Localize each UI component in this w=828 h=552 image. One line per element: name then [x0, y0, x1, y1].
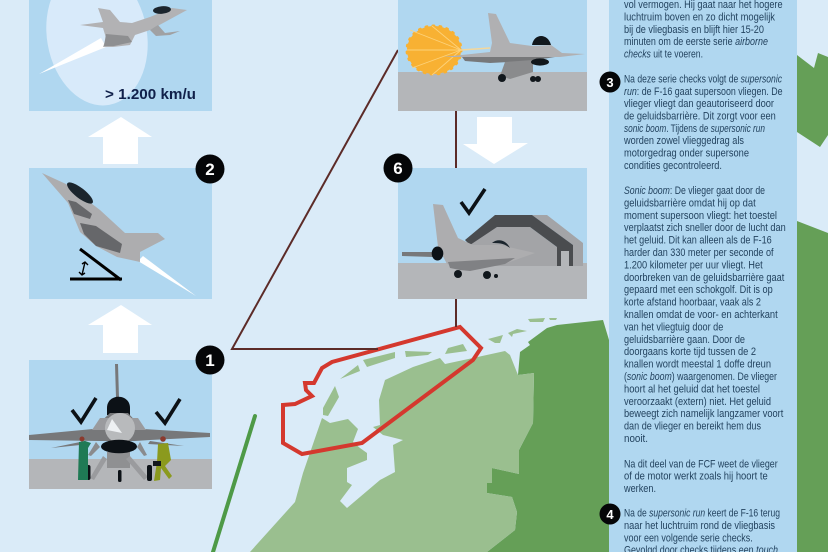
- paragraph: sonic boom: knallen omdat de voor- en achterkant: [624, 309, 778, 321]
- ground: [29, 459, 212, 489]
- paragraph: sonic boom: Sonic boom: De vlieger gaat door de: [624, 185, 765, 197]
- speed label: > 1.200 km/u: [105, 86, 196, 103]
- paragraph: sonic boom: doorbreken van de geluidsbarrière gaat: [624, 272, 784, 284]
- panel: steep climb: [29, 168, 212, 299]
- paragraph: supersonic run: condities gecontroleerd.: [624, 160, 722, 172]
- paragraph: supersonic run: sonic boom. Tijdens de supersonic run: [624, 123, 765, 135]
- step number 2: 2: [205, 160, 215, 179]
- shock cone: [36, 0, 158, 114]
- paragraph: sonic boom: harder dan 330 meter per seconde of: [624, 247, 774, 259]
- jet taxiing: [402, 204, 535, 279]
- paragraph: sonic boom: het geluid. Dit kan alleen als de F-16: [624, 235, 772, 247]
- hangar: [465, 215, 583, 266]
- paragraph: return: [624, 508, 780, 552]
- paragraph: sonic boom: moment supersoon vliegt: het toestel: [624, 210, 777, 222]
- map of the Netherlands: [250, 318, 612, 552]
- arrow: up: [88, 117, 152, 164]
- paragraph: return: voor een volgende serie checks.: [624, 532, 753, 544]
- ground: [398, 72, 587, 111]
- paragraph: sonic boom: dan de vlieger en bereikt hem dus: [624, 421, 761, 433]
- map: light green land: [250, 351, 534, 552]
- paragraph: sonic boom: beweegt zich namelijk langzamer voort: [624, 408, 783, 420]
- paragraph: climb: [624, 0, 783, 60]
- paragraph: sonic boom: hoort al het geluid dat het toestel: [624, 383, 760, 395]
- paragraph: supersonic run: [623, 74, 783, 172]
- brake parachute: [407, 26, 490, 75]
- flame: [39, 38, 106, 74]
- panel: pre-flight checks: [29, 360, 212, 489]
- step number 1: [196, 346, 224, 374]
- paragraph: sonic boom: knallen wordt meestal 1 doffe dreun: [624, 359, 771, 371]
- paragraph: supersonic run: de geluidsbarrière. Dit zorgt voor een: [624, 110, 776, 122]
- step number 1: 1: [205, 351, 215, 370]
- paragraph: sonic boom: [624, 185, 786, 445]
- paragraph: supersonic run: worden zowel vlieggedrag als: [623, 135, 744, 147]
- step number 4: 4: [606, 507, 614, 522]
- map: red test area outline: [283, 327, 481, 454]
- green route line: [213, 416, 255, 552]
- paragraph: return: Na de supersonic run keert de F-16 terug: [624, 508, 780, 520]
- ground: [398, 263, 587, 299]
- flame: [138, 256, 196, 296]
- paragraph: climb: minuten om de eerste serie airborne: [624, 36, 768, 48]
- paragraph: sonic boom: doorgaans korte tijd tussen de 2: [624, 346, 756, 358]
- connector lines: [232, 50, 456, 349]
- check mark: [156, 399, 180, 423]
- step number 2: [196, 154, 224, 184]
- panel: supersonic flight: [29, 0, 212, 114]
- paragraph: sonic boom: van het vliegtuig door de: [624, 321, 723, 333]
- paragraph: supersonic run: Na deze serie checks volgt de supersonic: [624, 74, 783, 86]
- paragraph: sonic boom: nooit.: [624, 433, 648, 445]
- arrow: up: [88, 305, 152, 353]
- paragraph: sonic boom: geluidsbarrière omdat hij op dat: [624, 197, 756, 209]
- mechanic in green: [78, 436, 91, 480]
- text column: [609, 0, 797, 552]
- panel: landing with parachute: [398, 0, 587, 111]
- paragraph: sonic boom: veroorzaakt (extern) niet. Het geluid: [624, 396, 771, 408]
- map: dark green eastern land: [487, 320, 612, 552]
- climb angle symbol: [70, 249, 122, 280]
- jet climbing steeply: [42, 173, 165, 262]
- map: Wadden islands: [323, 318, 557, 416]
- right side land: [797, 53, 828, 552]
- step number 4: [600, 504, 620, 524]
- paragraph: sonic boom: gepaard met een schokgolf. Dit is op: [624, 284, 773, 296]
- step number 3: 3: [606, 75, 614, 90]
- step number 6: 6: [393, 159, 403, 178]
- jet front view: [29, 364, 210, 482]
- paragraph: conclusion: [623, 458, 778, 495]
- pilot in olive: [153, 436, 172, 481]
- step number 6: [384, 154, 412, 182]
- check mark: [461, 189, 485, 213]
- paragraph: supersonic run: run: de F-16 gaat supersoon vliegen. De: [624, 86, 783, 98]
- paragraph: sonic boom: geluidsbarrière gaan. Door de: [624, 334, 745, 346]
- step number 3: [600, 72, 620, 92]
- paragraph: conclusion: of de motor werkt zoals hij hoort te: [624, 471, 768, 483]
- paragraph: conclusion: werken.: [623, 483, 656, 495]
- arrow: down: [463, 117, 528, 164]
- paragraph: supersonic run: vlieger vliegt dan geautoriseerd door: [624, 98, 774, 110]
- paragraph: climb: bij de vliegbasis en blijft hier 15-20: [624, 24, 764, 36]
- paragraph: return: naar het luchtruim rond de vliegbasis: [624, 520, 775, 532]
- paragraph: sonic boom: 1.200 kilometer per uur vliegt. Het: [624, 259, 763, 271]
- check mark: [72, 398, 96, 422]
- panel: back at the hangar: [398, 168, 587, 299]
- paragraph: climb: checks uit te voeren.: [624, 48, 703, 60]
- paragraph: sonic boom: korte afstand hoorbaar, vaak als 2: [624, 297, 761, 309]
- paragraph: climb: luchtruim boven en zo dicht mogelijk: [624, 12, 776, 24]
- paragraph: sonic boom: (sonic boom) waargenomen. De vlieger: [624, 371, 777, 383]
- paragraph: supersonic run: motorgedrag onder supersone: [624, 148, 749, 160]
- paragraph: conclusion: Na dit deel van de FCF weet de vlieger: [624, 458, 778, 470]
- jet landing: [443, 13, 585, 82]
- paragraph: sonic boom: verplaatst zich sneller door de lucht dan: [624, 222, 786, 234]
- jet climbing: [80, 5, 187, 47]
